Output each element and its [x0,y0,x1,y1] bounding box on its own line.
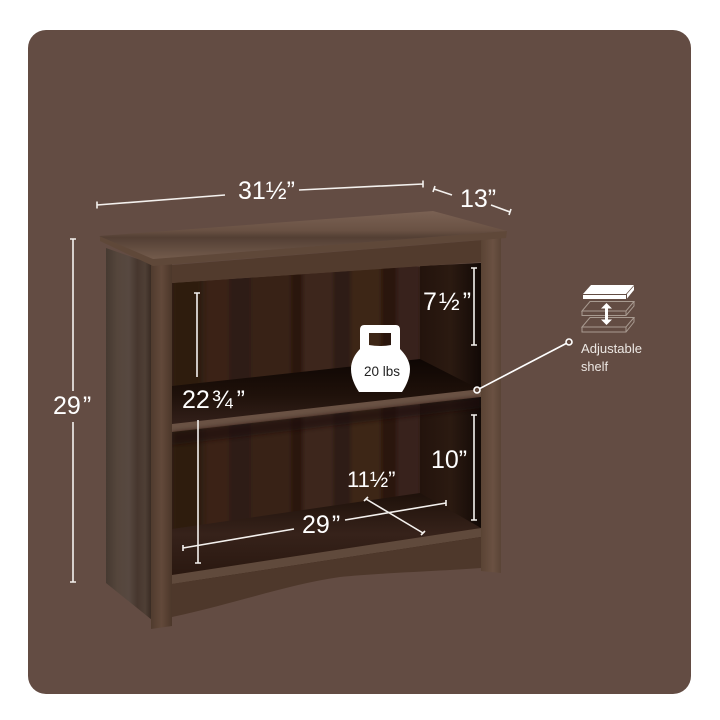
callout line to adjustable shelf [474,339,572,393]
top white shelf [583,285,634,294]
back panel wood grain stripes [176,266,420,524]
top board surface [99,211,507,259]
icon: adjustable shelf [582,285,634,332]
left front post [151,262,172,629]
dimension: upper shelf gap 7 1/2 [423,268,477,345]
dimension: interior height 22 3/4: 22¾” [182,386,245,414]
dimension: height 29: 29” [53,392,91,420]
icon: 20 lbs kettlebell weight: 20 lbs [364,363,400,379]
dimension: interior depth 11 1/2: 11½” [347,467,396,492]
right front post [481,238,501,573]
bottom shelf top [172,493,481,575]
dimension: width 31 1/2 [97,177,423,208]
dimension: interior depth 11 1/2 [347,467,425,535]
middle shelf top [172,359,481,425]
dimension: width 31 1/2: 31½” [238,177,295,205]
dimension: lower shelf gap 10 [431,415,477,520]
dimension: depth 13 [433,185,511,215]
top apron [172,240,483,283]
dimension: depth 13: 13” [460,185,496,213]
middle shelf front edge [172,389,481,432]
up-down arrow [601,303,612,325]
icon: 20 lbs kettlebell weight [351,325,410,392]
label: adjustable shelf: Adjustable [581,341,642,356]
right interior dark wall [420,263,481,530]
side panel [106,248,152,620]
dimension: lower shelf gap 10: 10” [431,446,467,474]
shadow below middle shelf [172,397,481,445]
dimension: interior width 29 [183,500,446,551]
label: adjustable shelf: shelf [581,359,608,374]
dimension: upper shelf gap 7 1/2: 7½” [423,288,471,316]
bottom shelf front edge [172,528,481,584]
back panel base [172,263,481,584]
top board front edge [100,231,507,266]
label: adjustable shelf [581,341,642,374]
dimension: interior width 29: 29” [302,511,340,539]
bookcase [99,211,507,629]
lower outline shelf [582,318,634,332]
toe kick [172,537,481,617]
middle outline shelf [582,302,634,316]
dimension: height 29 [53,239,91,582]
dimension: interior height 22 3/4 [182,293,245,563]
